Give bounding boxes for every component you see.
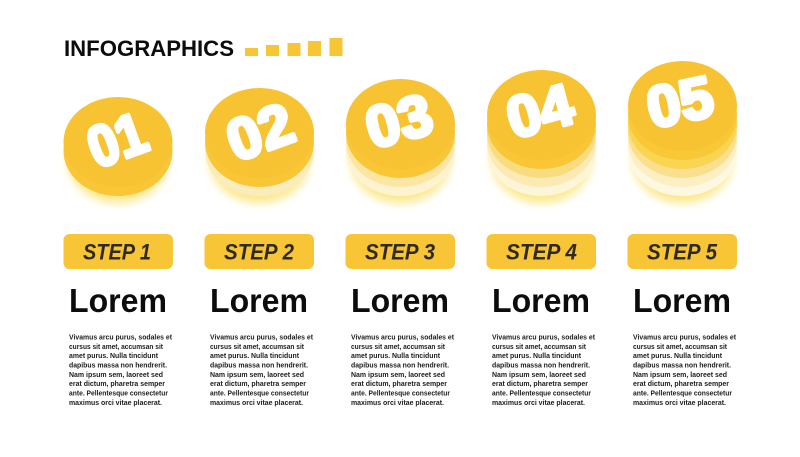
body text 5: Vivamus arcu purus, sodales et [633,332,736,342]
coin 02: 02 [218,91,302,174]
coin 04 [487,70,596,203]
body text 2: amet purus. Nulla tincidunt [210,351,300,360]
body text 2: Vivamus arcu purus, sodales et [210,332,313,342]
step badge 2 [204,234,314,269]
body text 2: cursus sit amet, accumsan sit [210,342,304,351]
body text 3: Vivamus arcu purus, sodales et [351,332,454,342]
heading 4: Lorem [492,282,590,319]
step badge 1 [64,234,173,269]
body text 2: maximus orci vitae placerat. [210,398,303,407]
body text 2: Nam ipsum sem, laoreet sed [210,370,304,379]
coin 02 [205,88,314,203]
body text 1: Vivamus arcu purus, sodales et [69,332,172,342]
step badge 3 [346,234,455,269]
body text 4: Vivamus arcu purus, sodales et [492,332,595,342]
title bars icon [245,38,342,56]
body text 1: ante. Pellentesque consectetur [69,388,168,398]
body text 2: erat dictum, pharetra semper [210,379,306,388]
heading 3: Lorem [351,282,449,319]
heading 5: Lorem [633,282,731,319]
body text 4: ante. Pellentesque consectetur [492,388,591,398]
body text 1: dapibus massa non hendrerit. [69,360,167,370]
title: INFOGRAPHICS [64,36,234,61]
coin 01 [64,97,172,203]
coin 04: 04 [500,72,580,151]
body text 5: erat dictum, pharetra semper [633,379,729,388]
step badge 5: STEP 5 [647,240,718,264]
body text 3: dapibus massa non hendrerit. [351,360,449,370]
body text 1: amet purus. Nulla tincidunt [69,351,159,360]
heading 1: Lorem [69,282,167,319]
body text 1 [69,332,172,407]
body text 4: erat dictum, pharetra semper [492,379,588,388]
body text 4: cursus sit amet, accumsan sit [492,342,586,351]
body text 4: Nam ipsum sem, laoreet sed [492,370,586,379]
body text 1: Nam ipsum sem, laoreet sed [69,370,163,379]
body text 1: erat dictum, pharetra semper [69,379,165,388]
body text 4: dapibus massa non hendrerit. [492,360,590,370]
body text 3: cursus sit amet, accumsan sit [351,342,445,351]
body text 5 [633,332,736,407]
step badge 2: STEP 2 [224,240,295,264]
body text 2: dapibus massa non hendrerit. [210,360,308,370]
coin 01: 01 [79,100,156,181]
body text 5: ante. Pellentesque consectetur [633,388,732,398]
body text 3 [351,332,454,407]
body text 1: cursus sit amet, accumsan sit [69,342,163,351]
heading 2: Lorem [210,282,308,319]
coin 05 [628,61,737,203]
step badge 1: STEP 1 [83,240,151,264]
step badge 4 [486,234,596,269]
coin 03 [346,79,455,203]
body text 3: amet purus. Nulla tincidunt [351,351,441,360]
coin 03: 03 [359,82,439,161]
body text 2: ante. Pellentesque consectetur [210,388,309,398]
body text 3: ante. Pellentesque consectetur [351,388,450,398]
body text 3: maximus orci vitae placerat. [351,398,444,407]
body text 4: maximus orci vitae placerat. [492,398,585,407]
body text 5: maximus orci vitae placerat. [633,398,726,407]
body text 2 [210,332,313,407]
body text 1: maximus orci vitae placerat. [69,398,162,407]
step badge 3: STEP 3 [365,240,435,264]
coin 05: 05 [641,64,719,141]
body text 5: cursus sit amet, accumsan sit [633,342,727,351]
step badge 4: STEP 4 [506,240,577,264]
body text 3: Nam ipsum sem, laoreet sed [351,370,445,379]
body text 5: dapibus massa non hendrerit. [633,360,731,370]
step badge 5 [628,234,737,269]
body text 4: amet purus. Nulla tincidunt [492,351,582,360]
body text 3: erat dictum, pharetra semper [351,379,447,388]
body text 5: amet purus. Nulla tincidunt [633,351,723,360]
body text 5: Nam ipsum sem, laoreet sed [633,370,727,379]
body text 4 [492,332,595,407]
